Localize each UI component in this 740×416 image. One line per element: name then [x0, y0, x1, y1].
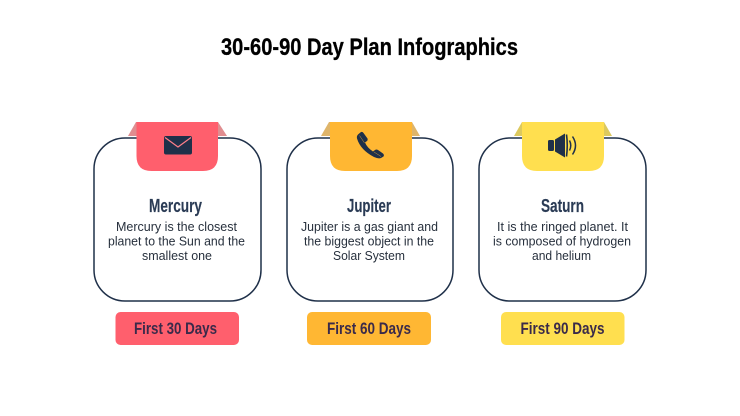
ribbon tab	[514, 122, 612, 171]
body text: Solar System	[333, 249, 405, 263]
body text: It is the ringed planet. It	[497, 220, 628, 234]
label: First 30 Days: First 30 Days	[134, 319, 217, 338]
label: First 60 Days	[307, 312, 431, 345]
body text: Mercury is the closest	[116, 220, 237, 234]
body text: Jupiter is a gas giant and	[301, 220, 438, 234]
card outline	[479, 138, 646, 301]
body text: smallest one	[142, 249, 212, 263]
heading: Jupiter	[347, 196, 391, 216]
card outline	[287, 138, 453, 301]
icon: envelope	[164, 136, 192, 154]
label: First 90 Days: First 90 Days	[520, 319, 604, 338]
icon: speaker	[548, 134, 576, 158]
icon: telephone	[357, 132, 384, 158]
heading: Mercury	[149, 196, 202, 216]
label: First 90 Days	[501, 312, 624, 345]
panel: Saturn	[479, 122, 646, 301]
panel: Mercury	[94, 122, 261, 301]
body text: the biggest object in the	[304, 234, 434, 248]
body text	[301, 220, 438, 263]
label: First 60 Days: First 60 Days	[327, 319, 411, 338]
label: First 30 Days	[116, 312, 239, 345]
ribbon tab	[321, 122, 420, 171]
title: 30-60-90 Day Plan Infographics	[221, 34, 518, 61]
body text	[493, 220, 631, 263]
card outline	[94, 138, 261, 301]
panel: Jupiter	[287, 122, 453, 301]
body text: is composed of hydrogen	[493, 234, 631, 248]
body text: and helium	[532, 249, 591, 263]
ribbon tab	[128, 122, 227, 171]
body text	[108, 220, 245, 263]
body text: planet to the Sun and the	[108, 234, 245, 248]
heading: Saturn	[541, 196, 584, 216]
